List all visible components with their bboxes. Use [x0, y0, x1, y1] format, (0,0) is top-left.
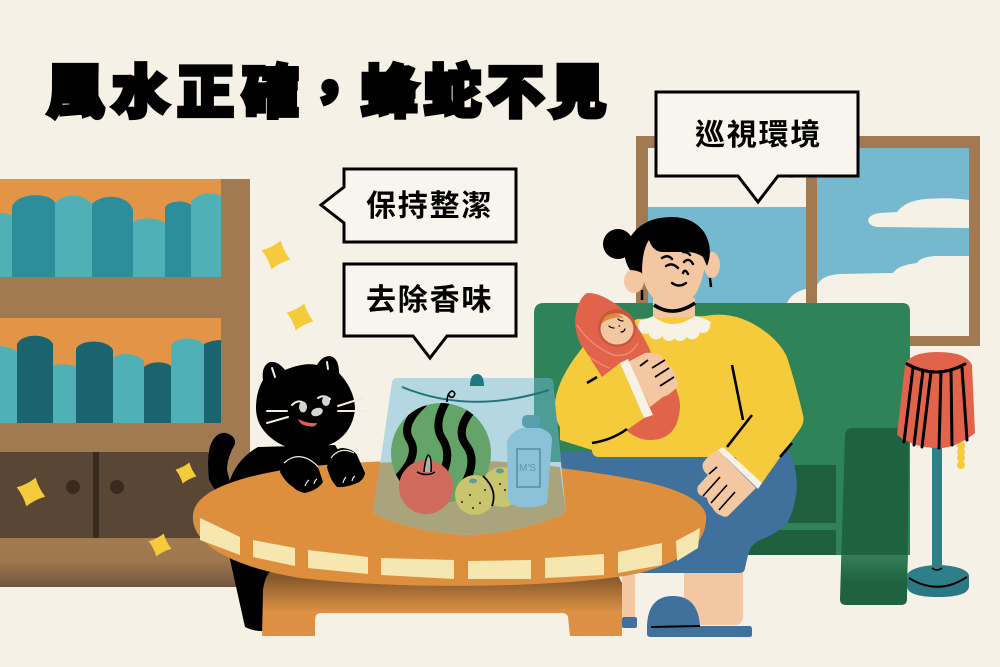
upper hand [628, 353, 677, 407]
far leg [622, 575, 635, 617]
skirt [560, 452, 797, 573]
sweater [560, 315, 804, 483]
shelf base [0, 538, 250, 587]
table edge inlay [200, 518, 700, 579]
coffee table [193, 460, 706, 636]
near leg [684, 570, 743, 625]
sofa arm [840, 428, 909, 605]
cat tail [208, 433, 235, 490]
bottle: M'S [519, 463, 536, 474]
back pear [482, 467, 522, 507]
cat [208, 356, 369, 631]
lower hand [697, 450, 756, 517]
facial features [662, 252, 693, 286]
sweater fold lines [727, 365, 792, 457]
choker [654, 303, 695, 311]
callout: 去除香味: 去除香味 [366, 284, 493, 317]
title: 風水正確，蜂蛇不見 [47, 61, 606, 125]
ears [704, 252, 720, 278]
front pear [455, 475, 495, 515]
woman [555, 217, 804, 637]
table legs [262, 570, 622, 636]
bottle [507, 415, 552, 507]
apple [399, 455, 453, 514]
neck [653, 298, 695, 326]
cat body [228, 445, 350, 520]
lamp base [907, 576, 969, 597]
lamp chain [957, 442, 965, 469]
books: lower shelf [0, 336, 221, 423]
callout: 保持整潔 [321, 169, 516, 242]
lamp shade [897, 352, 975, 448]
collar [638, 316, 711, 341]
sofa seat shadow [740, 465, 836, 555]
callout: 巡視環境: 巡視環境 [695, 119, 822, 152]
watermelon [391, 391, 491, 503]
table top [193, 460, 706, 586]
hair [603, 217, 710, 273]
cat lower leg [229, 555, 285, 631]
glass dome [373, 378, 566, 535]
cabinet [0, 452, 221, 538]
glass over table [373, 460, 566, 535]
cat head [256, 356, 355, 450]
face [641, 222, 707, 309]
dome knob [470, 374, 484, 386]
floor lamp [897, 352, 975, 597]
glass over sofa [534, 378, 561, 462]
bookshelf [0, 179, 250, 587]
callout: 去除香味 [344, 264, 516, 358]
baby bundle [575, 293, 680, 440]
callout: 巡視環境 [656, 92, 858, 202]
slipper [647, 596, 752, 637]
window [636, 136, 980, 346]
books: upper shelf [0, 194, 221, 277]
callout: 保持整潔: 保持整潔 [366, 190, 493, 223]
earrings [642, 278, 711, 300]
sofa [534, 303, 910, 605]
glass cloche with fruit [373, 374, 566, 535]
sparkles [12, 236, 318, 560]
upper cuff [620, 359, 653, 418]
sleeve [555, 347, 644, 442]
lower cuff [718, 447, 762, 489]
cat paws [280, 448, 365, 493]
